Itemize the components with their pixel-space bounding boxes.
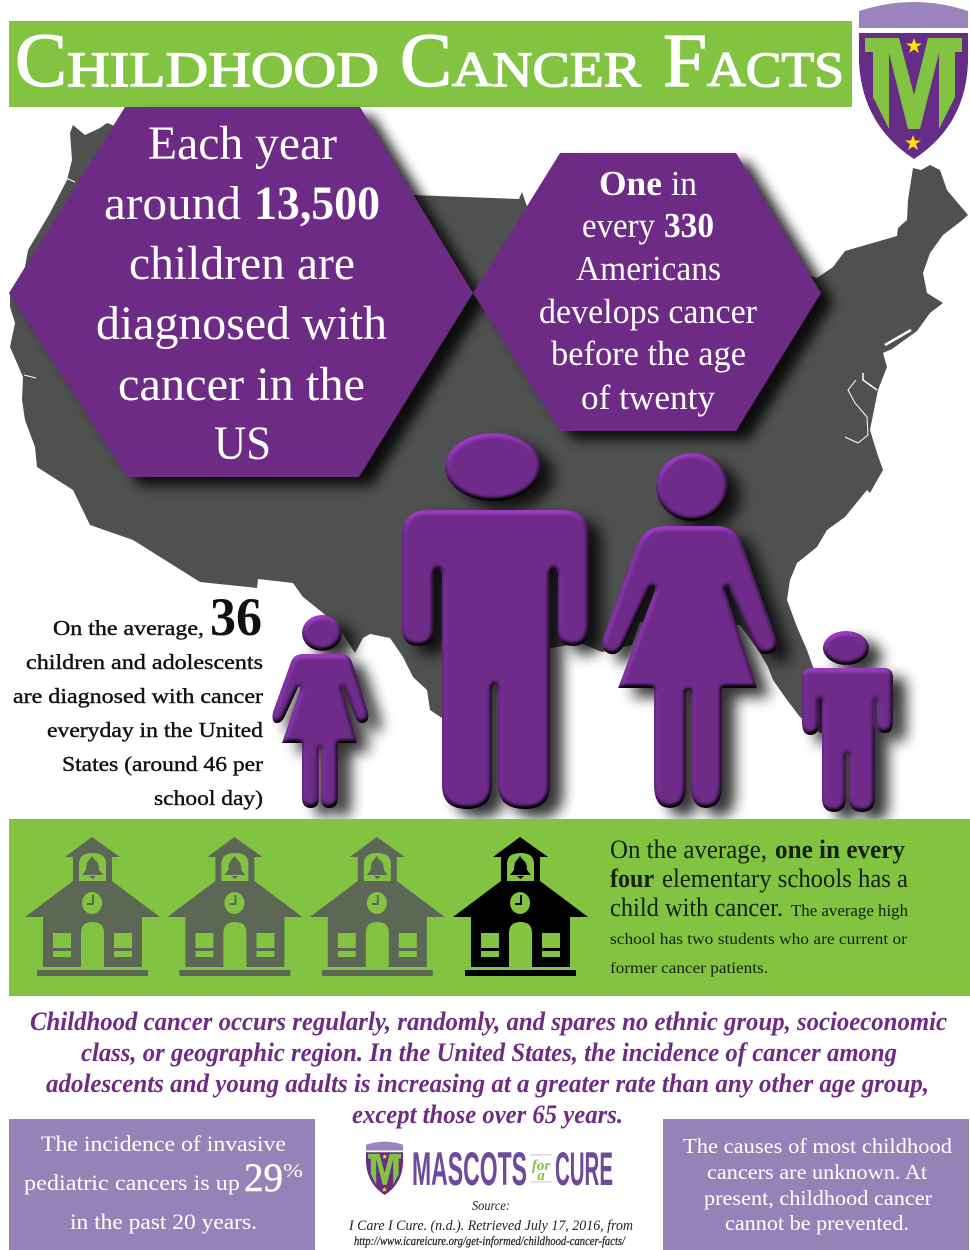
figure: girl (272, 615, 368, 808)
text: 36 children per day: States (around 46 per (62, 752, 263, 776)
source citation (348, 1199, 633, 1248)
text: 36 children per day: children and adolescents (26, 650, 263, 674)
title banner: C (15, 19, 67, 103)
title banner: C (400, 19, 452, 103)
statement: incidence paragraph: class, or geographic region. In the United States, the incidence of cancer among (81, 1038, 897, 1067)
text: one in four schools: former cancer patients. (610, 960, 768, 977)
text: one in four schools: school has two students who are current or (610, 931, 908, 948)
panel: 29 percent (9, 1119, 315, 1250)
text: one in four schools: one in every (775, 835, 905, 864)
hexagon text: one in 330: Americans (576, 249, 721, 288)
text: one in four schools: elementary schools has a (662, 864, 908, 893)
logo: small shield (366, 1142, 403, 1195)
title banner (9, 19, 852, 107)
statement: incidence paragraph: adolescents and young adults is increasing at a greater rate than any other age group, (46, 1069, 929, 1098)
text: one in four schools: child with cancer. (610, 893, 783, 922)
statement: incidence paragraph: except those over 65 years. (352, 1100, 623, 1129)
hexagon text: one in 330: of twenty (581, 378, 715, 417)
hexagon text: one in 330: 330 (664, 206, 714, 245)
hexagon text: one in 330: every (582, 206, 655, 245)
hexagon text: one in 330: before the age (551, 334, 746, 373)
text: 36 children per day: school day) (154, 786, 263, 810)
source citation: http://www.icareicure.org/get-informed/childhood-cancer-facts/ (354, 1234, 626, 1248)
title banner: ACTS (707, 41, 844, 97)
hexagon text: 13,500 (96, 117, 387, 470)
text: 36 children per day: everyday in the United (47, 718, 264, 742)
text: 36 children per day: 36 (210, 587, 262, 647)
icon: school 4 (highlighted) (453, 837, 588, 976)
title banner: F (663, 19, 707, 103)
logo wordmark: Mascots for a Cure: a (537, 1168, 545, 1184)
hexagon text: one in 330: One (599, 164, 662, 203)
text: 36 children per day (13, 587, 264, 810)
statement: incidence paragraph: Childhood cancer occurs regularly, randomly, and spares no ethnic group, socioeconomic (30, 1007, 947, 1036)
panel: 29 percent: 29 (244, 1155, 283, 1200)
title banner: ANCER (452, 41, 642, 97)
hexagon text: one in 330: develops cancer (539, 292, 757, 331)
hexagon text: one in 330 (539, 164, 757, 417)
panel: unknown causes: cannot be prevented. (725, 1211, 909, 1235)
text: CURE (555, 1142, 613, 1195)
hexagon: one in every 330 (473, 153, 821, 431)
panel: 29 percent: The incidence of invasive (41, 1131, 286, 1156)
map of the United States (10, 123, 968, 733)
logo wordmark: Mascots for a Cure: for (532, 1158, 550, 1174)
hexagon text: 13,500: around (104, 177, 241, 230)
panel: unknown causes: The causes of most childhood (683, 1134, 953, 1158)
figure: man (402, 433, 589, 809)
hexagon text: one in 330: in (671, 164, 697, 203)
hexagon text: 13,500: US (214, 417, 271, 470)
icon: school 3 (310, 837, 445, 976)
text: one in four schools: four (610, 864, 654, 893)
icon: school 2 (167, 837, 302, 976)
hexagon text: 13,500: cancer in the (118, 358, 365, 411)
logo wordmark: Mascots for a Cure: MASCOTS (412, 1142, 527, 1195)
title banner: HILDHOOD (67, 41, 379, 97)
source citation: Source: (472, 1199, 510, 1214)
text: 36 children per day: are diagnosed with cancer (13, 684, 263, 708)
source citation: I Care I Cure. (n.d.). Retrieved July 17, 2016, from (348, 1218, 633, 1234)
panel: 29 percent: pediatric cancers is up (24, 1170, 240, 1195)
figure: boy (802, 631, 893, 812)
panel: unknown causes: present, childhood cancer (704, 1186, 932, 1210)
statement: incidence paragraph (30, 1007, 947, 1129)
panel: unknown causes (663, 1119, 969, 1250)
panel: 29 percent: % (283, 1160, 303, 1182)
text: one in four schools: The average high (791, 901, 908, 920)
hexagon text: 13,500: children are (129, 237, 355, 290)
hexagon text: 13,500: 13,500 (254, 177, 380, 230)
logo: shield (859, 2, 968, 159)
text: one in four schools (610, 835, 908, 977)
text: one in four schools: On the average, (610, 835, 767, 864)
panel: 29 percent: in the past 20 years. (70, 1209, 257, 1234)
panel: schools (9, 819, 970, 996)
icon: school 1 (25, 837, 160, 976)
figure: woman (602, 453, 777, 808)
hexagon text: 13,500: diagnosed with (96, 297, 387, 350)
panel: unknown causes: cancers are unknown. At (707, 1160, 927, 1184)
hexagon text: 13,500: Each year (148, 117, 337, 170)
text: 36 children per day: On the average, (53, 616, 204, 640)
hexagon: 13,500 children diagnosed (9, 107, 473, 477)
